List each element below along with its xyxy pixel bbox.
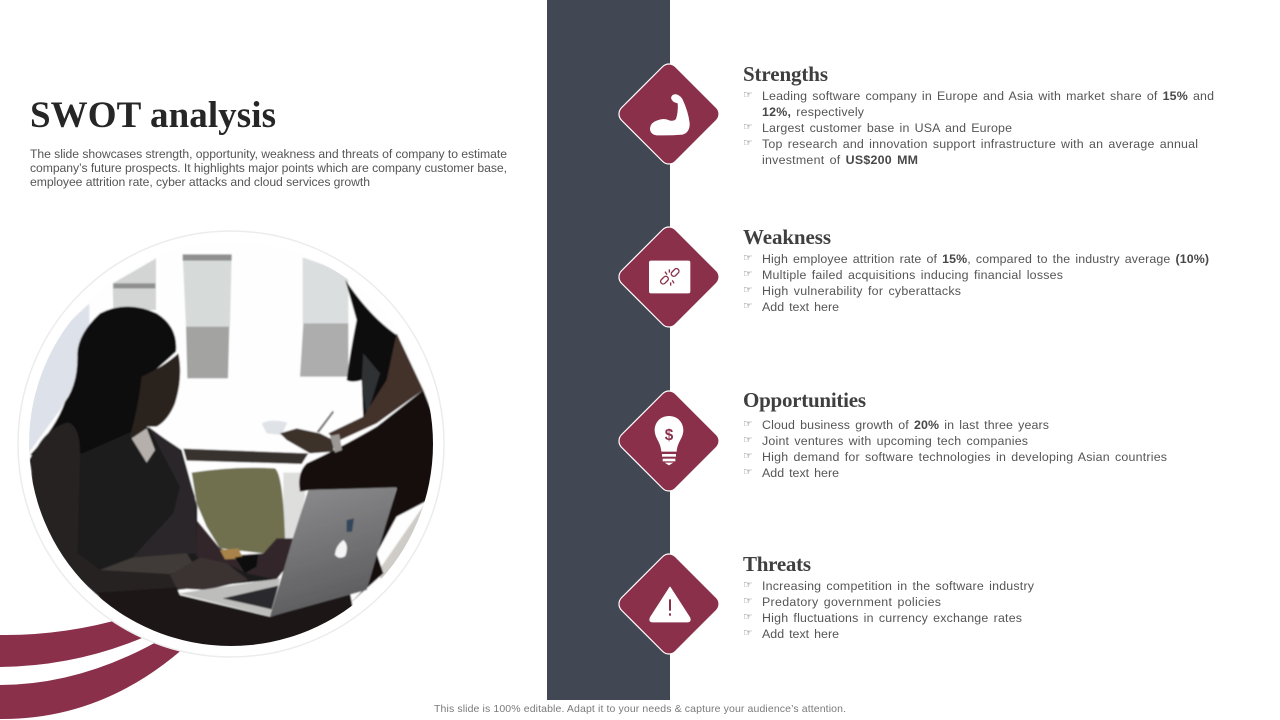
bullet list: opportunities: ☞ (743, 434, 752, 446)
description text: employee attrition rate, cyber attacks and cloud services growth (30, 175, 370, 189)
bullet list: weakness: ☞ (743, 252, 752, 264)
bullet list: weakness: ☞ (743, 284, 752, 296)
left woman: base silhouette (29, 422, 277, 595)
bullet list: strengths: Largest customer base in USA and Europe (762, 121, 1012, 135)
bullet list: threats: Predatory government policies (762, 595, 941, 609)
dark vertical band (547, 0, 670, 700)
heading: threats: Threats (743, 552, 811, 576)
photo: two women working with a laptop (18, 231, 444, 657)
bullet list: weakness: Multiple failed acquisitions inducing financial losses (762, 268, 1063, 282)
left woman: dress lapel (133, 427, 197, 557)
bullet list: weakness (743, 252, 1209, 314)
right woman (345, 280, 400, 420)
bullet list: weakness: ☞ (743, 300, 752, 312)
bullet list: opportunities: High demand for software technologies in developing Asian countries (762, 450, 1167, 464)
heading: weakness: Weakness (743, 225, 831, 249)
bullet list: strengths: investment of US$200 MM (762, 153, 918, 167)
left woman: hair (30, 307, 176, 455)
heading: opportunities: Opportunities (743, 388, 866, 412)
bullet list: strengths: ☞ (743, 89, 752, 101)
bullet list: threats: Increasing competition in the software industry (762, 579, 1035, 593)
section: weakness (743, 225, 1209, 314)
bullet list: opportunities: Add text here (762, 466, 839, 480)
lap (95, 587, 353, 650)
bullet list: opportunities: Cloud business growth of 20% in last three years (762, 418, 1049, 432)
bullet list: opportunities: Joint ventures with upcoming tech companies (762, 434, 1028, 448)
bullet list: strengths: ☞ (743, 121, 752, 133)
bullet list: strengths: ☞ (743, 137, 752, 149)
bullet list: strengths: Leading software company in Europe and Asia with market share of 15% and (762, 89, 1214, 103)
diamond icon: threats (warning triangle) (615, 550, 723, 658)
description text: The slide showcases strength, opportunity, weakness and threats of company to estimate (30, 147, 507, 161)
laptop (178, 578, 280, 617)
bullet list: weakness: Add text here (762, 300, 839, 314)
bullet list: threats (743, 579, 1035, 641)
bullet list: threats: Add text here (762, 627, 839, 641)
section: strengths (743, 62, 1214, 167)
bullet list: threats: ☞ (743, 595, 752, 607)
decorative ribbons (0, 610, 205, 719)
left woman: near arm (31, 422, 177, 595)
bullet list: weakness: High employee attrition rate of 15%, compared to the industry average (10%) (762, 252, 1209, 266)
diamond icon: opportunities (light bulb): $ (665, 427, 674, 444)
bullet list: strengths: Top research and innovation support infrastructure with an average annual (762, 137, 1198, 151)
bullet list: threats: High fluctuations in currency exchange rates (762, 611, 1022, 625)
left woman: face and neck (130, 353, 182, 437)
bullet list: threats: ☞ (743, 579, 752, 591)
bullet list: weakness: High vulnerability for cyberattacks (762, 284, 961, 298)
footer note: This slide is 100% editable. Adapt it to your needs & capture your audience’s attention. (434, 703, 846, 715)
bullet list: strengths (743, 89, 1214, 167)
heading: strengths: Strengths (743, 62, 828, 86)
diamond icon: strengths (flexed arm) (615, 60, 723, 168)
bullet list: threats: ☞ (743, 627, 752, 639)
description text: company’s future prospects. It highlights major points which are company customer base, (30, 161, 507, 175)
section: threats (743, 552, 1035, 641)
title: SWOT analysis (30, 95, 276, 136)
bullet list: strengths: 12%, respectively (762, 105, 865, 119)
bullet list: opportunities: ☞ (743, 418, 752, 430)
left woman: hands and far arm (197, 520, 294, 579)
bullet list: opportunities: ☞ (743, 466, 752, 478)
diamond icon: opportunities (light bulb) (615, 387, 723, 495)
bullet list: opportunities (743, 418, 1167, 480)
section: opportunities (743, 388, 1167, 480)
description text (30, 147, 507, 189)
diamond icon: weakness (broken link) (615, 223, 723, 331)
bullet list: weakness: ☞ (743, 268, 752, 280)
bullet list: threats: ☞ (743, 611, 752, 623)
bullet list: opportunities: ☞ (743, 450, 752, 462)
